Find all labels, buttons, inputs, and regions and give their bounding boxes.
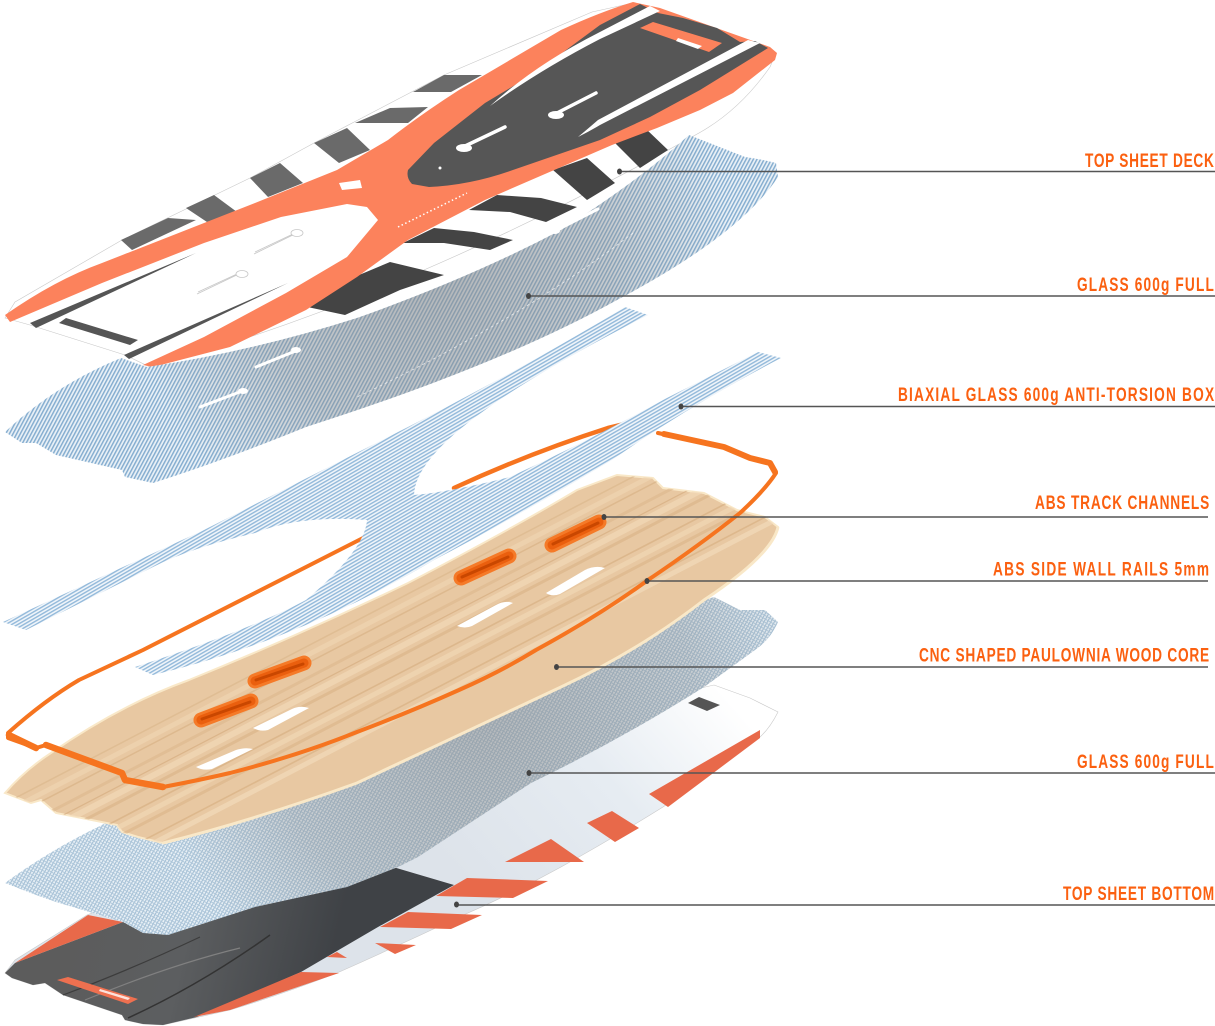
deck logo patch (640, 22, 722, 52)
callout: wood core: CNC SHAPED PAULOWNIA WOOD CORE (919, 644, 1209, 666)
callout: top sheet deck (617, 150, 1215, 174)
upper glass weave (5, 135, 778, 483)
upper glass shading (5, 135, 778, 483)
deck stripes lower (298, 128, 668, 315)
deck orange X (5, 2, 777, 367)
callout: glass 600g full upper (526, 274, 1215, 299)
deck slots (463, 93, 596, 147)
wood core base (5, 475, 778, 843)
upper glass centre seam (357, 233, 633, 397)
wood lower edge (163, 527, 778, 843)
layer: top sheet bottom (5, 685, 778, 1025)
upper glass slots (200, 209, 598, 407)
lower glass shading (5, 597, 778, 935)
callout: wood core (554, 644, 1209, 670)
deck panel white lines (490, 6, 760, 137)
bottom sheet red stripes (15, 730, 760, 1017)
callout: top sheet deck: TOP SHEET DECK (1085, 150, 1214, 172)
layer: top sheet deck (5, 2, 777, 367)
track channel 2 (461, 556, 509, 578)
layer: ABS track channels (201, 522, 599, 720)
callout: glass 600g full lower (526, 751, 1215, 776)
layer: lower glass (5, 597, 778, 935)
deck outline slot ends (236, 230, 303, 278)
track channel 1 (552, 522, 599, 545)
deck white base (5, 3, 776, 367)
callout: ABS track channels (602, 492, 1209, 520)
layer: upper glass (5, 135, 778, 483)
deck white-end dark stripes (30, 253, 288, 359)
bottom sheet base (5, 685, 778, 1025)
wood slot holes (196, 567, 605, 770)
deck dot row (398, 193, 467, 227)
callout: top sheet bottom (454, 883, 1215, 908)
deck slot ends (438, 111, 564, 170)
lower glass weave (5, 597, 778, 935)
deck outline slots (197, 232, 299, 294)
track channel 4 (201, 701, 251, 720)
bottom sheet logo patch (57, 977, 138, 1004)
track channel 3 (255, 663, 304, 681)
callout: top sheet bottom: TOP SHEET BOTTOM (1063, 883, 1214, 905)
callout: ABS side wall rails: ABS SIDE WALL RAILS 5mm (993, 558, 1209, 580)
callout: ABS track channels: ABS TRACK CHANNELS (1035, 492, 1209, 514)
deck sticker (339, 180, 362, 190)
callout: biaxial glass: BIAXIAL GLASS 600g ANTI-TORSION BOX (898, 384, 1214, 406)
layer: ABS side wall rails (8, 422, 776, 787)
bottom sheet tail streaks (63, 935, 270, 1018)
layer: biaxial glass anti-torsion box (3, 307, 781, 675)
wood grain (16, 476, 773, 842)
deck stripes upper (121, 75, 482, 250)
bottom sheet dark tail (5, 867, 454, 1025)
callout: biaxial glass (678, 384, 1215, 410)
bottom sheet dark square (688, 697, 720, 711)
callout: ABS side wall rails (644, 558, 1209, 584)
upper glass slot ends (238, 228, 560, 394)
deck dark panel (408, 4, 768, 187)
layer: wood core (4, 474, 780, 844)
callout: glass 600g full upper: GLASS 600g FULL (1077, 274, 1214, 296)
callout: glass 600g full lower: GLASS 600g FULL (1077, 751, 1214, 773)
